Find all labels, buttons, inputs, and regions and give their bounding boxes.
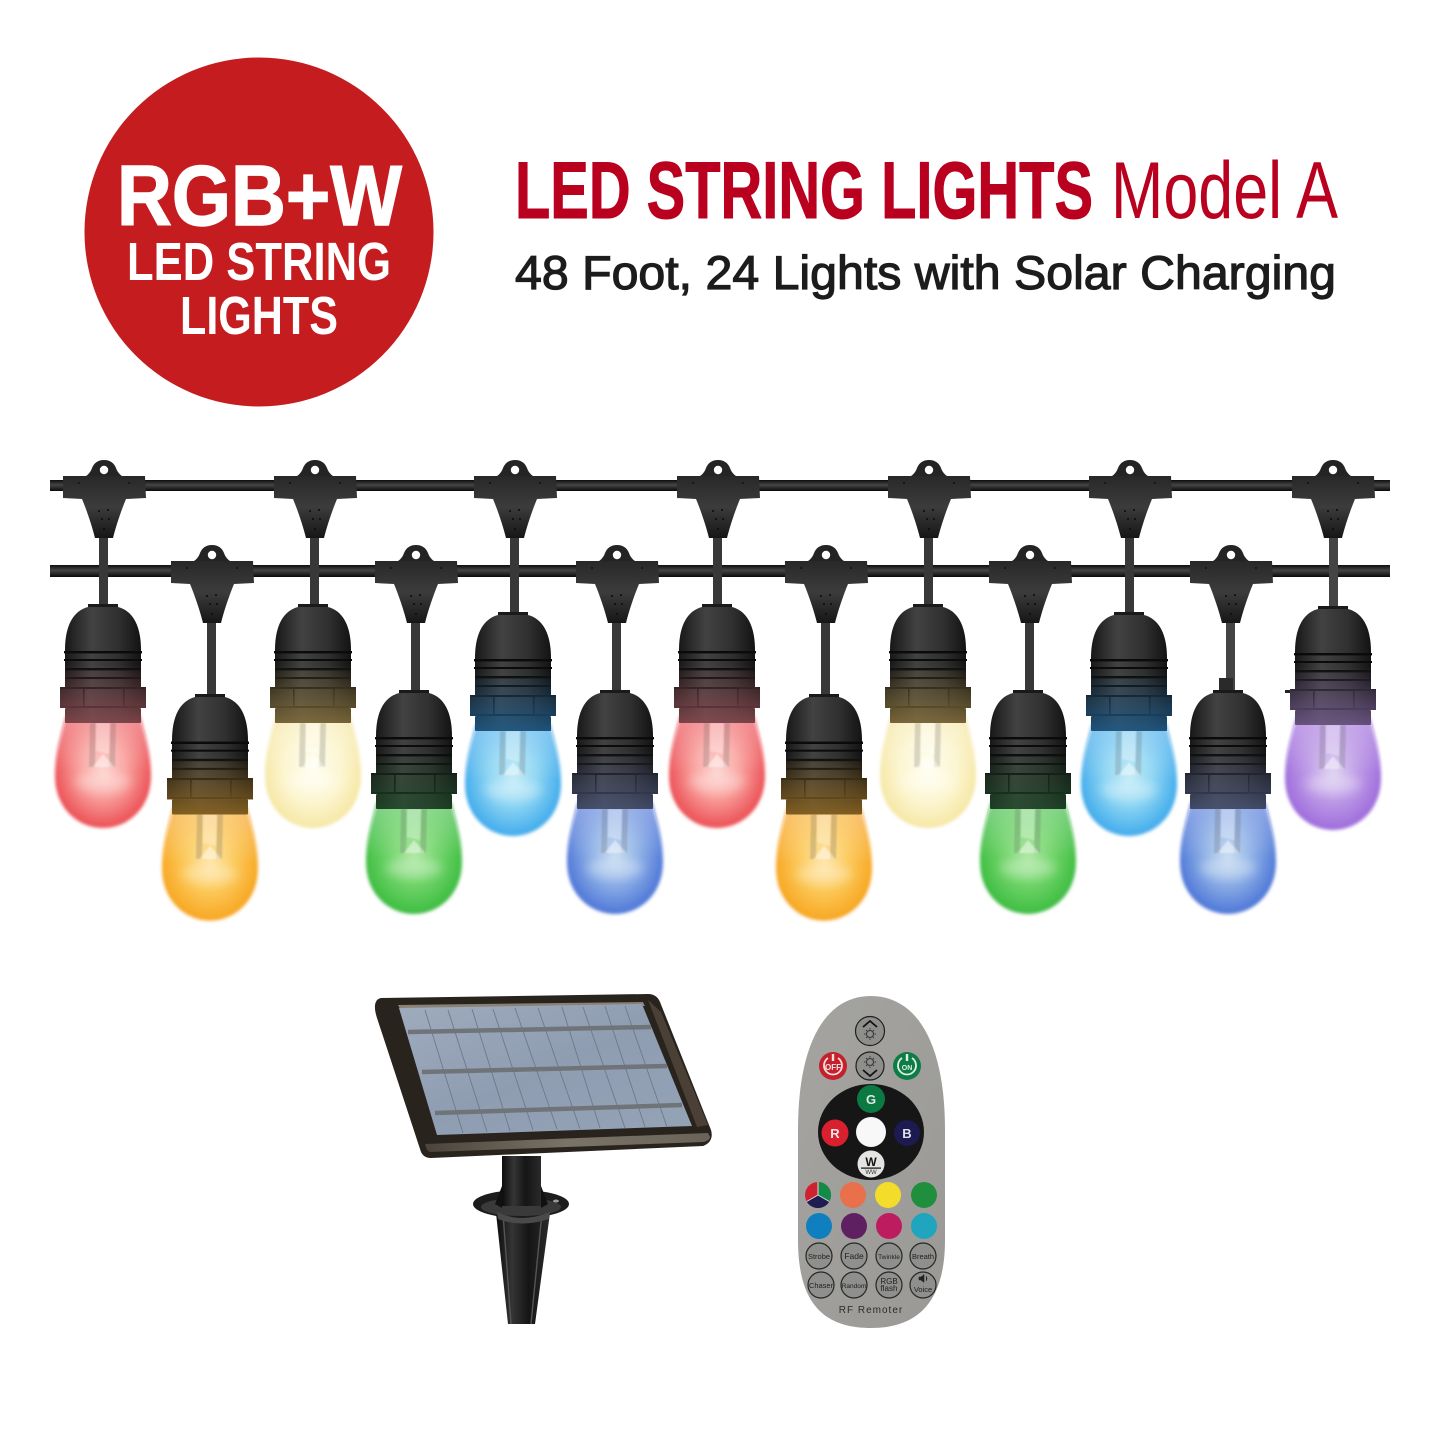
lamp: green 1 <box>366 545 462 914</box>
effect button labels <box>808 1251 934 1294</box>
remote control <box>798 996 945 1328</box>
lamp: amber 2 <box>776 545 872 921</box>
lamp: cyan 2 <box>1081 460 1177 836</box>
lower cable <box>50 565 1390 577</box>
brightness up button <box>856 1016 884 1046</box>
effect button labels: Fade <box>844 1251 864 1261</box>
brightness down button <box>856 1052 884 1080</box>
lamp: cream 1 <box>265 460 361 828</box>
subtitle: 48 Foot, 24 Lights with Solar Charging <box>515 246 1336 299</box>
effect button labels: Breath <box>912 1252 934 1261</box>
off button <box>819 1052 847 1080</box>
effect button labels: Strobe <box>808 1252 830 1261</box>
RGBW colour wheel: W <box>865 1155 877 1169</box>
effect button labels: Chaser <box>809 1281 834 1290</box>
effect button labels: RGB <box>880 1277 898 1286</box>
badge: RGB+W LED string lights: LIGHTS <box>180 286 338 346</box>
lamp: red 1 <box>55 460 151 828</box>
effect button labels: flash <box>881 1284 897 1293</box>
solar cells <box>399 1004 692 1135</box>
badge: RGB+W LED string lights: RGB+W <box>117 149 403 244</box>
spike stake <box>473 1156 569 1324</box>
effect button labels: Random <box>842 1283 866 1290</box>
effect button labels: Twinkle <box>878 1254 900 1261</box>
title: Model A <box>1111 146 1338 236</box>
on button <box>893 1052 921 1080</box>
RGBW colour wheel: G <box>866 1092 876 1107</box>
upper cable <box>50 480 1390 491</box>
badge: RGB+W LED string lights <box>84 58 434 406</box>
solar panel <box>375 994 712 1324</box>
remote body <box>798 996 945 1328</box>
RGBW colour wheel <box>818 1084 924 1180</box>
colour buttons <box>805 1182 937 1239</box>
RGBW colour wheel: WW <box>865 1170 877 1176</box>
lamp: blue 2 <box>1180 545 1276 914</box>
lamp: amber 1 <box>162 545 258 921</box>
title: LED STRING LIGHTS <box>515 146 1093 236</box>
string lights <box>50 460 1390 921</box>
off button: OFF <box>825 1063 841 1072</box>
RGBW colour wheel: R <box>830 1126 840 1141</box>
on button: ON <box>902 1065 912 1072</box>
lamp: green 2 <box>980 545 1076 914</box>
lamp: red 2 <box>669 460 765 828</box>
lamp: blue 1 <box>567 545 663 914</box>
effect buttons <box>806 1243 936 1298</box>
effect button labels: Voice <box>914 1285 932 1294</box>
lamp: cream 2 <box>880 460 976 828</box>
badge: RGB+W LED string lights: LED STRING <box>127 232 391 292</box>
RGBW colour wheel: B <box>902 1126 912 1141</box>
lamp: cyan 1 <box>465 460 561 836</box>
remote name: RF Remoter <box>839 1305 903 1316</box>
panel frame <box>375 994 712 1158</box>
lamp: purple <box>1285 460 1381 830</box>
